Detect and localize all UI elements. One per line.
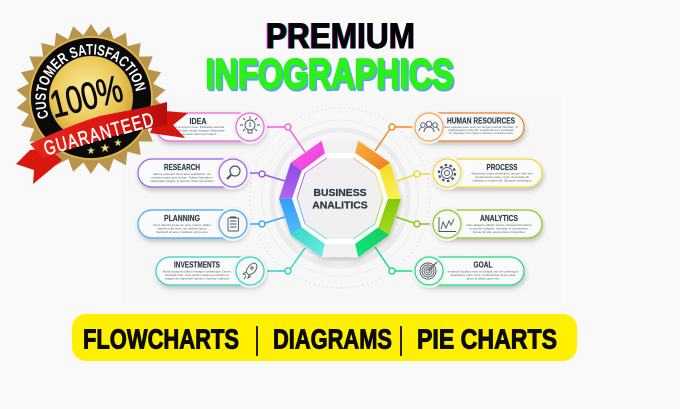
pill: human resources: HUMAN RESOURCES <box>447 116 516 126</box>
bottom white segment <box>322 244 358 257</box>
arc text: CUSTOMER SATISFACTION <box>35 44 146 119</box>
stars: ★ <box>114 138 123 149</box>
stars: ★ <box>87 146 96 157</box>
hub shadow and white body <box>279 141 401 257</box>
inner coloured outline <box>297 158 383 239</box>
segment: lime <box>378 199 401 235</box>
pill: human resources: pellentesque tortor elit, a eleifend eros venenatis <box>448 128 514 132</box>
pill: investments: INVESTMENTS <box>174 260 221 270</box>
inner face <box>297 158 383 239</box>
diagram background panel <box>122 97 562 303</box>
icon: people <box>419 121 439 132</box>
banner labels: DIAGRAMS <box>273 324 392 354</box>
connector: process <box>397 171 433 181</box>
connector: human resources <box>375 124 415 151</box>
banner labels: FLOWCHARTS <box>83 324 239 354</box>
pill: process: PROCESS <box>486 163 518 172</box>
segment: orange <box>355 141 390 170</box>
guaranteed text: GUARANTEED <box>41 109 157 160</box>
pill: analytics <box>430 207 542 241</box>
pill: investments <box>156 254 267 288</box>
pill: goal: GOAL <box>474 260 493 270</box>
title: premium: PREMIUM <box>265 17 415 56</box>
pill: research <box>138 156 250 190</box>
pill: human resources: Nam egestas justo ante, eu tempus lacinia interdum. In <box>444 125 518 129</box>
pill: goal: lacus id ullamcorper nisi <box>467 276 500 280</box>
pill: research: RESEARCH <box>164 163 200 172</box>
banner separators <box>257 326 401 356</box>
icon: light bulb <box>240 116 260 133</box>
segment: purple <box>279 163 302 199</box>
icon: magnifier <box>227 166 240 179</box>
background rings <box>250 108 430 288</box>
pill: idea: IDEA <box>190 117 207 126</box>
connector: goal <box>375 247 415 274</box>
pill: investments: magnis dis parturient montes, nascetur ridiculus <box>165 276 230 280</box>
banner labels <box>83 324 557 354</box>
icon: rocket <box>243 263 257 279</box>
pill: human resources <box>412 110 524 144</box>
segment: green <box>355 227 389 257</box>
segment: teal <box>291 227 325 257</box>
icon: target <box>420 262 437 279</box>
hub title: BUSINESS <box>313 188 367 199</box>
pill: process: condimentum purus. Cras ut suscipit elit <box>475 175 529 179</box>
pill: analytics: Donec id ante quam primis in faucibus <box>473 230 525 234</box>
pill: process: Maecenas lorem vestibulum, lectum nibh sed <box>472 172 533 176</box>
title: premium: PREMIUM <box>267 17 415 56</box>
pill: human resources: id. Quisque non metus maximus, faucibus justo <box>449 131 513 135</box>
connector: investments <box>265 248 305 274</box>
pill: planning: Nunc lobortis luctus ac enim mauris. Etiam <box>153 223 211 227</box>
icon: gear <box>439 165 455 181</box>
pill: planning: hendrerit sit amet, habitant primis arcu <box>156 230 208 234</box>
pill: process: interdum a, mauris elit. Quisque scelerisque <box>472 178 532 182</box>
pill: investments: a blandit odio. Cum sociis natoque penatibus et <box>165 273 229 277</box>
ribbon band <box>30 102 167 158</box>
pill: goal <box>412 254 524 288</box>
top white segment <box>322 141 358 153</box>
ribbon left tail <box>16 148 62 184</box>
segment: magenta <box>291 141 325 171</box>
banner labels: PIE CHARTS <box>417 324 557 354</box>
title: premium: PREMIUM <box>266 17 415 56</box>
pill: analytics: Nam aliquam efficitur cursus. Praesent hendrerit <box>466 223 532 227</box>
pill: idea: eget amet dolor sed mauris <box>180 132 217 136</box>
pill: goal: Vestibulum enim risus, condimentum at leo vitae <box>450 273 516 277</box>
gold centre <box>49 56 133 140</box>
connector: research <box>247 171 285 181</box>
title: infographics: INFOGRAPHICS <box>206 50 454 97</box>
icon: line chart <box>439 217 456 232</box>
pill: analytics: ex purus et aliquet, interdum in consectetur. <box>470 226 529 230</box>
guarantee badge <box>16 24 188 184</box>
hub title: ANALITICS <box>312 200 368 212</box>
pill: investments: Morbi tincidunt nulla in tristique scelerisque. Donec <box>163 270 232 274</box>
pill: planning: PLANNING <box>164 214 200 223</box>
pill: research: interdum justo ante rutrum. Nullam bibendum <box>152 176 213 180</box>
title: infographics: INFOGRAPHICS <box>207 52 455 99</box>
icon: clipboard <box>228 217 238 231</box>
segment: yellow <box>379 163 401 199</box>
pill: planning <box>138 207 250 241</box>
pill: goal: Vivamus faucibus eros id suscipit sed mi scelerisque <box>448 270 519 274</box>
segment: blue <box>279 199 302 235</box>
100 percent: 100% <box>46 68 127 127</box>
central decagon diagram <box>279 141 401 257</box>
pill: idea <box>156 110 267 144</box>
pill: research: Mauris praesent nisi a ante vestibulum, vel <box>153 172 211 176</box>
ribbon right tail <box>150 111 188 138</box>
pill: research: malesuada magna, id pretium nulla consectetur <box>150 179 214 183</box>
pill: process <box>430 156 542 190</box>
gold starburst <box>16 24 166 174</box>
yellow banner <box>72 314 577 361</box>
stars: ★ <box>100 141 110 155</box>
connector: planning <box>247 217 285 227</box>
connector: idea <box>265 124 305 152</box>
pill: idea: feugiat vitae neque volutpat. Maecenas <box>171 128 225 132</box>
stars <box>87 138 123 157</box>
connector: analytics <box>396 217 433 227</box>
dark ring <box>30 37 152 159</box>
pill: analytics: ANALYTICS <box>480 214 519 223</box>
pill: planning: blandit nulla risus, nec facilisis lacus <box>158 226 207 230</box>
pill: idea: Sed ut tempor risus. Phasellus pulvinar <box>172 125 224 129</box>
